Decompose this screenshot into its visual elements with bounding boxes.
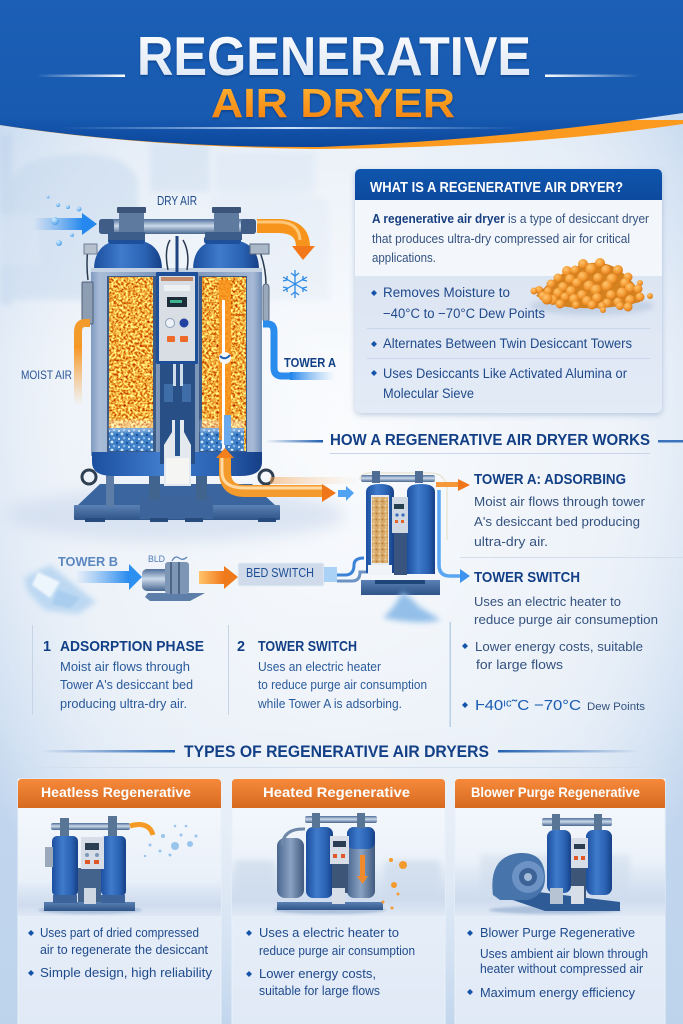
tower B flow: ice pile and arrow [24,554,142,614]
bed switch box [238,563,324,586]
bullet text: suitable for large flows [259,984,380,998]
small process dryer [360,471,447,622]
compressor unit [142,554,205,601]
label: tower B: TOWER B [58,554,118,569]
powder pile [383,592,441,622]
bullet text: Uses ambient air blown through [480,947,648,961]
step 1: adsorption phase [32,625,204,715]
bed switch box: BED SWITCH [246,565,314,580]
step 1: adsorption phase: producing ultra-dry air. [60,697,187,711]
bullet: lower energy costs [462,639,643,672]
bullet text [467,926,648,1000]
bullet: dew points [462,697,646,714]
bullet text [246,926,415,998]
bullet: lower energy costs: Lower energy costs, suitable [475,639,643,654]
tower A adsorbing: ultra-dry air. [474,534,548,549]
definition text: applications. [372,250,436,265]
bullet list: Alternates Between Twin Desiccant Towers [383,336,632,351]
label: BLD: BLD [148,554,165,565]
base frame [74,463,280,522]
hoses and side valves [82,236,269,324]
pipes: bed switch to small dryer [324,558,368,582]
arrow: regeneration flow to small dryer [216,448,360,502]
icon: snowflake [283,270,307,298]
bullet: dew points: Dew Points [587,701,646,713]
heat particles [382,858,407,910]
header banner [0,0,683,149]
panel heading: WHAT IS A REGENERATIVE AIR DRYER? [370,179,623,196]
control panel [156,272,198,364]
arrow: to tower A adsorbing [436,479,470,491]
exhaust and droplets [130,824,198,857]
step 2: tower switch: Uses an electric heater [258,660,381,674]
arrow: moist air pipe [74,323,90,405]
bullet: dew points: Ⱶ40ᶦᶜ˜C −70°C [475,697,581,714]
card header: Heatless Regenerative [41,784,191,800]
top manifold pipe [99,207,256,240]
label: dry air: DRY AIR [157,194,197,208]
definition text [372,211,650,265]
tower switch: TOWER SWITCH [474,569,580,586]
arrow: moist air inlet with droplets [33,196,97,246]
step 2: tower switch: to reduce purge air consumption [258,678,427,692]
bullet list: −40°C to −70°C Dew Points [383,306,545,321]
definition text: that produces ultra-dry compressed air for critical [372,231,630,246]
step 2: tower switch: 2 [237,638,245,655]
bullet text: Uses part of dried compressed [40,926,199,940]
arrow: compressor to bed switch [199,566,238,589]
dryer illustration [489,814,621,914]
main twin tower dryer illustration [5,207,345,541]
tower bodies [91,236,262,476]
card: heatless regenerative [18,779,221,1024]
bullet list: Removes Moisture to [383,285,510,300]
step 1: adsorption phase: Tower A's desiccant bed [60,678,193,692]
card header [232,779,445,808]
bullet text: reduce purge air consumption [259,944,415,958]
arrow: dry air outlet [257,222,315,260]
tower A adsorbing: A's desiccant bed producing [474,514,640,529]
section heading: how it works: HOW A REGENERATIVE AIR DRYER WORKS [330,432,650,449]
card header [455,779,665,808]
panel: what is a regenerative air dryer [355,169,662,413]
label: moist air: MOIST AIR [21,370,72,382]
step 1: adsorption phase: ADSORPTION PHASE [60,638,204,655]
bullet text: Simple design, high reliability [40,966,213,980]
mechanical centre column [160,364,195,486]
dryer illustration [274,813,386,914]
tower A adsorbing: TOWER A: ADSORBING [474,471,626,488]
definition text: A regenerative air dryer is a type of desiccant dryer [372,211,650,226]
left desiccant window [107,276,156,452]
bullet text [28,926,213,980]
panel heading [355,169,662,200]
bullet text: Uses a electric heater to [259,926,399,940]
right column: tower text blocks [460,471,683,714]
bullet text: air to regenerate the desiccant [40,943,209,957]
bullet text: Lower energy costs, [259,967,376,981]
bullet text: Maximum energy efficiency [480,986,636,1000]
bullet text: heater without compressed air [480,962,643,976]
step 2: tower switch: TOWER SWITCH [258,638,357,655]
title [137,25,531,126]
card header: Heated Regenerative [263,784,410,800]
card header [18,779,221,808]
step 1: adsorption phase: 1 [43,638,51,655]
bullet text: Blower Purge Regenerative [480,926,635,940]
tower switch [474,569,658,627]
background: faint industrial plant [0,135,330,305]
label: tower A: TOWER A [284,356,336,370]
step 1: adsorption phase: Moist air flows through [60,660,190,674]
right desiccant window [199,276,247,452]
tower switch: Uses an electric heater to [474,594,621,609]
section heading: types: TYPES OF REGENERATIVE AIR DRYERS [184,742,489,761]
bullet list: Uses Desiccants Like Activated Alumina or [383,366,627,381]
dryer illustration [38,816,142,914]
card header: Blower Purge Regenerative [471,784,640,800]
icon: desiccant pellet pile [530,258,654,315]
card: blower purge regenerative [455,779,665,1024]
step 2: tower switch [228,625,427,715]
step 2: tower switch: while Tower A is adsorbing. [257,697,402,711]
card: heated regenerative [232,779,445,1024]
bullet list [367,285,650,401]
arrow: tower A outlet pipe [263,324,335,380]
bullet: lower energy costs: for large flows [476,657,564,672]
arrow: to tower switch [439,490,470,583]
title: REGENERATIVE [137,25,531,87]
title: AIR DRYER [211,80,455,126]
tower switch: reduce purge air consumeption [474,612,658,627]
bullet list: Molecular Sieve [383,386,474,401]
tower A adsorbing [474,471,646,549]
tower A adsorbing: Moist air flows through tower [474,494,646,509]
